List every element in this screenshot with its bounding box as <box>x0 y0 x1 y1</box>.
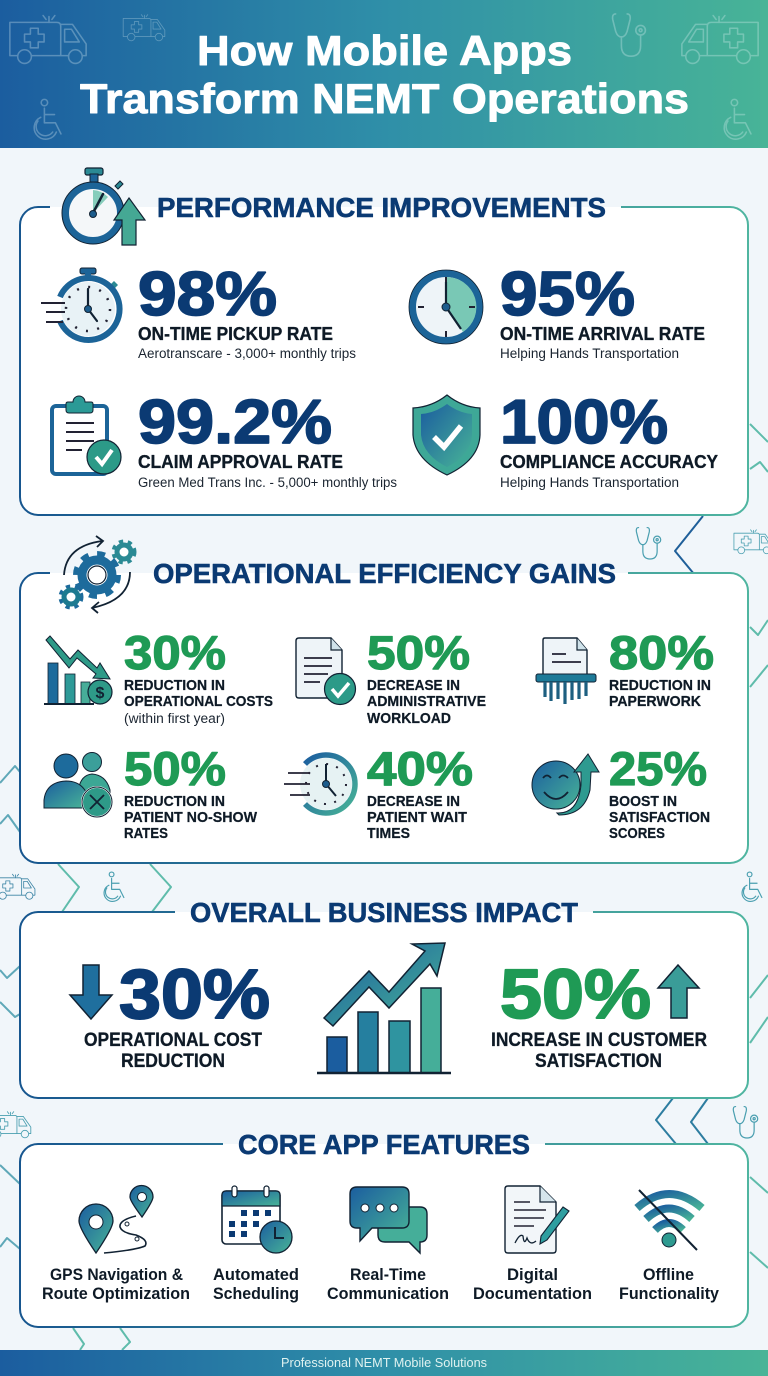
feature: offline functionality <box>619 1190 720 1303</box>
header decorative icons <box>10 14 758 139</box>
panel: overall business impact <box>20 897 748 1098</box>
feature: gps navigation: Route Optimization <box>42 1285 190 1303</box>
stat: compliance accuracy: COMPLIANCE ACCURACY <box>500 452 718 472</box>
background icons <box>0 528 768 1138</box>
heading: CORE APP FEATURES <box>238 1129 530 1160</box>
stat: no-show rates: 50% <box>124 742 226 795</box>
title <box>80 27 689 122</box>
feature: gps navigation <box>42 1186 190 1303</box>
icon: down arrow <box>70 965 112 1019</box>
icon: calendar with clock <box>222 1186 292 1253</box>
stat: on-time arrival: ON-TIME ARRIVAL RATE <box>500 324 705 344</box>
stat: patient wait times: 40% <box>367 742 473 795</box>
icon: smiley with arrow <box>532 754 599 815</box>
stat: satisfaction scores <box>532 742 710 842</box>
stat: on-time arrival: 95% <box>500 260 635 329</box>
stat: on-time arrival <box>409 260 705 361</box>
stat: administrative workload: WORKLOAD <box>367 710 451 727</box>
stat: paperwork: PAPERWORK <box>609 693 701 710</box>
panel: core app features <box>20 1129 748 1327</box>
feature: real-time communication: Communication <box>327 1285 449 1303</box>
stat: operational costs: OPERATIONAL COSTS <box>124 693 273 710</box>
icon: paper shredder <box>536 638 596 704</box>
panel: performance improvements <box>20 168 748 515</box>
feature: automated scheduling: Scheduling <box>213 1285 299 1303</box>
title: Transform NEMT Operations <box>80 75 689 122</box>
stat: no-show rates: REDUCTION IN <box>124 793 225 810</box>
background chevrons <box>0 424 768 1350</box>
footer <box>0 1350 768 1376</box>
stat: no-show rates <box>44 742 258 842</box>
stat: administrative workload <box>296 626 486 727</box>
stat: paperwork: REDUCTION IN <box>609 677 711 694</box>
panel: operational efficiency gains <box>20 536 748 863</box>
stat: claim approval: Green Med Trans Inc. - 5,000+ monthly trips <box>138 475 397 490</box>
stat: cost reduction: 30% <box>119 955 270 1033</box>
icon: declining chart: $ <box>96 685 104 702</box>
stat: satisfaction scores: 25% <box>609 742 707 795</box>
stat: operational costs: (within first year) <box>124 711 225 726</box>
heading: PERFORMANCE IMPROVEMENTS <box>157 192 606 223</box>
icon: shield with check <box>413 395 480 475</box>
stat: operational costs: REDUCTION IN <box>124 677 225 694</box>
heading: OVERALL BUSINESS IMPACT <box>190 897 578 928</box>
stat: on-time pickup <box>41 260 356 361</box>
stat: compliance accuracy: 100% <box>500 388 668 457</box>
icon: declining chart <box>44 636 112 704</box>
stat: cost reduction: REDUCTION <box>121 1051 225 1072</box>
icon: clipboard with check <box>52 396 121 474</box>
icon: up arrow <box>658 965 699 1018</box>
feature: automated scheduling: Automated <box>213 1266 299 1284</box>
stat: on-time arrival: Helping Hands Transportation <box>500 346 679 361</box>
title: How Mobile Apps <box>197 27 572 74</box>
icon: signed document with pen <box>505 1186 569 1253</box>
icon: document with check <box>296 638 356 704</box>
stat: compliance accuracy <box>413 388 718 490</box>
feature: real-time communication <box>327 1187 449 1303</box>
icon: stopwatch with up arrow <box>62 168 145 245</box>
feature: digital documentation <box>473 1186 592 1303</box>
feature: offline functionality: Functionality <box>619 1285 720 1303</box>
stat: administrative workload: DECREASE IN <box>367 677 460 694</box>
icon: chat bubbles <box>350 1187 427 1253</box>
stat: satisfaction scores: BOOST IN <box>609 793 677 810</box>
stat: administrative workload: 50% <box>367 626 470 679</box>
stat: patient wait times: TIMES <box>367 825 410 842</box>
stat: customer satisfaction: 50% <box>500 955 651 1033</box>
stat: no-show rates: RATES <box>124 825 168 842</box>
stat: operational costs <box>44 626 273 726</box>
icon: stopwatch <box>41 268 120 340</box>
feature: real-time communication: Real-Time <box>350 1266 426 1284</box>
stat: paperwork <box>536 626 714 710</box>
stat: paperwork: 80% <box>609 626 714 679</box>
stat: patient wait times <box>284 742 473 842</box>
stat: no-show rates: PATIENT NO-SHOW <box>124 809 258 826</box>
stat: cost reduction: OPERATIONAL COST <box>84 1030 262 1051</box>
feature: digital documentation: Documentation <box>473 1285 592 1303</box>
feature: offline functionality: Offline <box>643 1266 694 1284</box>
stat: cost reduction <box>70 955 270 1072</box>
stat: claim approval: 99.2% <box>138 388 332 457</box>
icon: fast clock <box>284 755 355 813</box>
stat: customer satisfaction <box>491 955 707 1072</box>
icon: gears with arrows <box>61 536 134 613</box>
icon: wifi crossed out <box>637 1190 702 1250</box>
stat: on-time pickup: Aerotranscare - 3,000+ monthly trips <box>138 346 356 361</box>
heading: OPERATIONAL EFFICIENCY GAINS <box>153 558 616 589</box>
feature: automated scheduling <box>213 1186 299 1303</box>
header banner <box>0 0 768 148</box>
stat: claim approval <box>52 388 397 490</box>
stat: patient wait times: DECREASE IN <box>367 793 460 810</box>
stat: on-time pickup: 98% <box>138 260 277 329</box>
stat: on-time pickup: ON-TIME PICKUP RATE <box>138 324 333 344</box>
stat: patient wait times: PATIENT WAIT <box>367 809 467 826</box>
icon: clock <box>409 270 483 344</box>
icon: people with x <box>44 752 112 817</box>
stat: administrative workload: ADMINISTRATIVE <box>367 693 486 710</box>
stat: operational costs: 30% <box>124 626 226 679</box>
stat: satisfaction scores: SCORES <box>609 825 665 842</box>
feature: gps navigation: GPS Navigation & <box>50 1266 183 1284</box>
icon: rising bar chart <box>317 943 451 1073</box>
stat: compliance accuracy: Helping Hands Transportation <box>500 475 679 490</box>
feature: digital documentation: Digital <box>507 1266 558 1284</box>
stat: satisfaction scores: SATISFACTION <box>609 809 710 826</box>
stat: customer satisfaction: INCREASE IN CUSTOMER <box>491 1030 707 1051</box>
stat: customer satisfaction: SATISFACTION <box>535 1051 662 1072</box>
stat: claim approval: CLAIM APPROVAL RATE <box>138 452 343 472</box>
footer: Professional NEMT Mobile Solutions <box>281 1356 487 1370</box>
icon: map pins and route <box>79 1186 153 1253</box>
